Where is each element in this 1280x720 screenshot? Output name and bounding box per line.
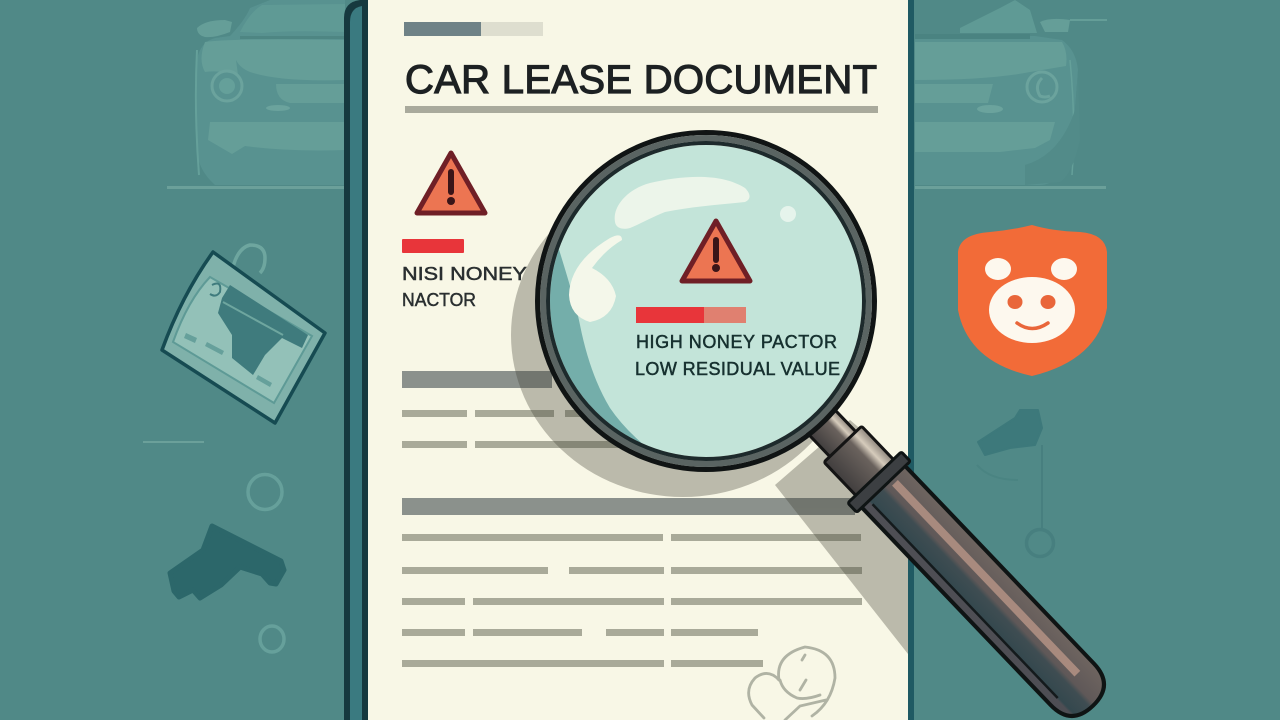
- magnifying glass: [530, 132, 1120, 720]
- lens ring: [538, 132, 874, 470]
- faded car right: [915, 0, 1107, 185]
- grip lower seam: [873, 504, 1058, 698]
- faded horizontal rules: [143, 186, 1106, 443]
- icon: faded ring top: [248, 474, 282, 510]
- warning triangle left: [417, 153, 485, 213]
- red bar left: [402, 239, 464, 253]
- red progress bar in lens: [636, 307, 746, 323]
- icon: faded dark bird figure: [977, 410, 1042, 528]
- glare dot: [780, 206, 796, 222]
- document text lines: [402, 371, 862, 667]
- lens crescent: [550, 250, 642, 443]
- handle: [793, 395, 1120, 720]
- lens warning text: [635, 332, 840, 379]
- warning label left: [402, 263, 527, 310]
- title: CAR LEASE DOCUMENT: [405, 58, 877, 102]
- handle collar: [848, 452, 910, 512]
- top header bar: [404, 22, 543, 36]
- icon: dark gun silhouette: [170, 526, 284, 598]
- warning label left: NISI NONEY: [402, 263, 527, 284]
- smile: [1017, 323, 1048, 328]
- document page: [368, 0, 908, 720]
- face: [989, 277, 1075, 343]
- left glare: [569, 235, 622, 322]
- grip highlight: [895, 483, 1077, 674]
- signature stamp: [749, 647, 835, 720]
- handle neck: [807, 408, 858, 459]
- right ear: [1051, 258, 1077, 280]
- icon: faded ring right: [1026, 530, 1054, 556]
- infographic scene: [143, 0, 1107, 720]
- warning label left: NACTOR: [402, 289, 476, 310]
- icon: tag card: [162, 245, 325, 423]
- left eye: [1008, 295, 1022, 309]
- lens warning text: HIGH NONEY PACTOR: [636, 332, 837, 352]
- warning triangle in lens: [682, 221, 750, 281]
- icon: orange shield face badge: [958, 225, 1107, 376]
- magnifier shadow: [511, 173, 908, 654]
- lens warning text: LOW RESIDUAL VALUE: [635, 359, 840, 379]
- handle ferrule: [824, 426, 896, 498]
- document binder edge: [344, 0, 914, 720]
- handle grip: [858, 462, 1115, 720]
- title rule: [405, 106, 878, 113]
- faded car left: [196, 0, 345, 185]
- top glare: [615, 177, 750, 229]
- lens glass: [550, 145, 862, 457]
- right eye: [1040, 295, 1056, 309]
- left ear: [985, 258, 1011, 280]
- icon: faded ring bottom: [260, 626, 284, 652]
